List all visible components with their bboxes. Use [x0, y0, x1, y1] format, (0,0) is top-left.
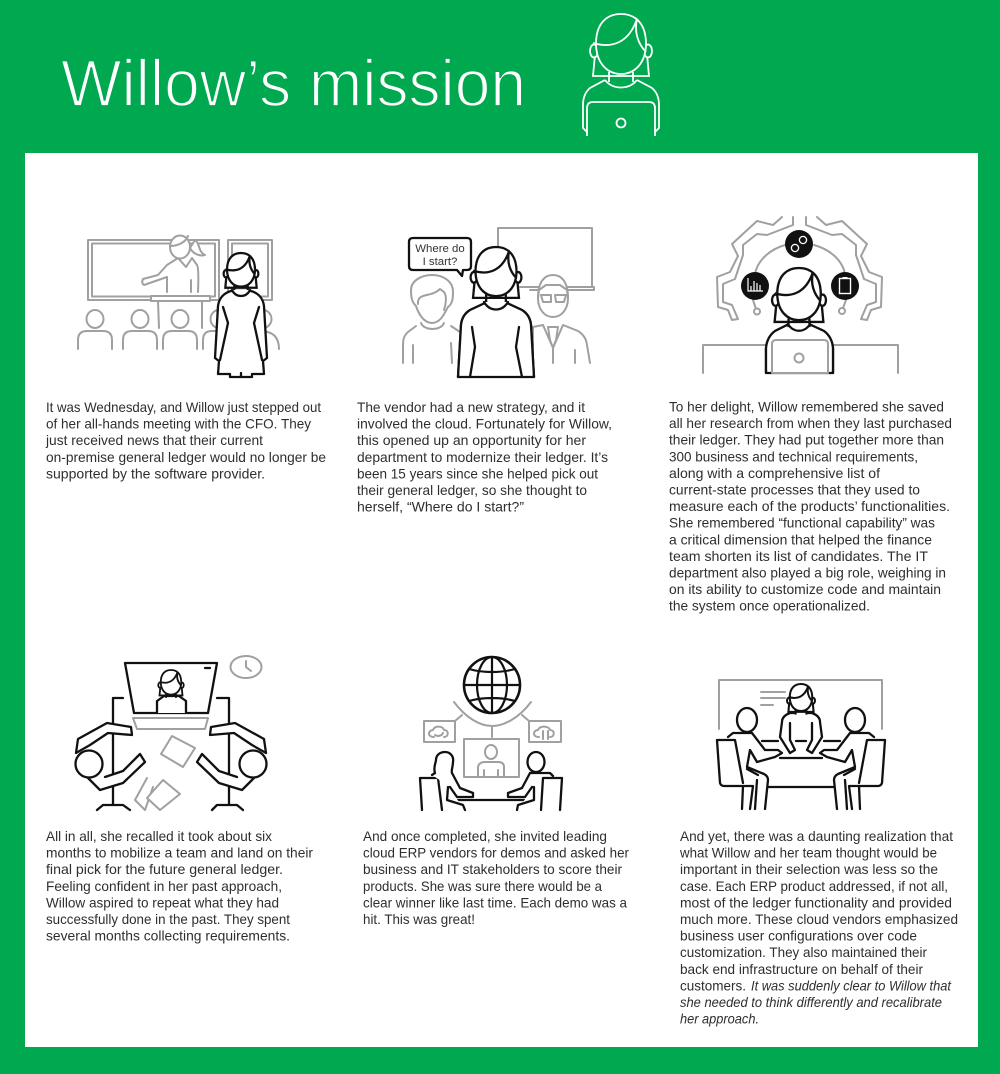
- text: paragraph 3: team shorten its list of candidates. The IT: [669, 549, 928, 564]
- text: paragraph 6: important in their selection was less so the: [680, 862, 938, 877]
- text: paragraph 2: their general ledger, so she thought to: [357, 483, 587, 498]
- text: paragraph 6: [679, 829, 958, 1027]
- text: paragraph 4: months to mobilize a team and land on their: [46, 846, 313, 861]
- text: paragraph 6: It was suddenly clear to Willow that: [751, 978, 952, 993]
- text: paragraph 2: been 15 years since she helped pick out: [357, 466, 598, 481]
- text: paragraph 6: business user configurations over code: [680, 929, 917, 944]
- illustration: all-hands meeting: [78, 236, 279, 377]
- illustration: cloud vendor demos with globe: [420, 657, 562, 810]
- text: paragraph 3: their ledger. They had put together more than: [669, 433, 944, 448]
- text: paragraph 4: several months collecting requirements.: [46, 929, 290, 944]
- text: paragraph 3: 300 business and technical requirements,: [669, 449, 918, 464]
- text: paragraph 3: department also played a big role, weighing in: [669, 566, 946, 580]
- text: paragraph 3: measure each of the products’ functionalities.: [669, 499, 950, 514]
- text: paragraph 1: on-premise general ledger would no longer be: [46, 450, 326, 465]
- text: paragraph 3: the system once operationalized.: [669, 599, 870, 614]
- text: paragraph 3: all her research from when they last purchased: [669, 416, 952, 431]
- text: paragraph 4: Willow aspired to repeat what they had: [46, 895, 279, 910]
- text: paragraph 6: what Willow and her team thought would be: [679, 846, 937, 861]
- text: paragraph 2: herself, “Where do I start?”: [357, 500, 524, 515]
- text: paragraph 5: clear winner like last time. Each demo was a: [363, 895, 627, 910]
- text: paragraph 3: on its ability to customize code and maintain: [669, 582, 941, 597]
- text: paragraph 4: final pick for the future general ledger.: [46, 862, 283, 877]
- speech bubble text: I start?: [423, 256, 457, 268]
- text: paragraph 1: just received news that their current: [45, 433, 263, 448]
- text: paragraph 6: most of the ledger functionality and provided: [680, 895, 952, 910]
- text: paragraph 6: her approach.: [680, 1012, 759, 1027]
- text: paragraph 3: She remembered “functional capability” was: [669, 516, 935, 531]
- text: paragraph 3: [669, 400, 952, 614]
- text: paragraph 2: The vendor had a new strategy, and it: [357, 400, 585, 415]
- text: paragraph 6: customers.: [680, 978, 746, 993]
- text: paragraph 5: products. She was sure there would be a: [363, 879, 602, 894]
- text: paragraph 6: And yet, there was a daunting realization that: [680, 829, 953, 844]
- text: paragraph 4: [46, 829, 313, 944]
- text: paragraph 3: a critical dimension that helped the finance: [669, 532, 932, 547]
- text: paragraph 6: back end infrastructure on behalf of their: [680, 962, 923, 977]
- icon: Willow with laptop: [583, 14, 659, 136]
- text: paragraph 3: To her delight, Willow remembered she saved: [669, 400, 944, 414]
- text: paragraph 1: of her all-hands meeting with the CFO. They: [46, 417, 311, 432]
- text: paragraph 5: cloud ERP vendors for demos and asked her: [363, 846, 629, 861]
- text: paragraph 2: this opened up an opportunity for her: [357, 433, 586, 448]
- title: Willow’s mission: [61, 46, 526, 120]
- text: paragraph 1: It was Wednesday, and Willow just stepped out: [46, 400, 321, 415]
- text: paragraph 4: All in all, she recalled it took about six: [46, 829, 272, 844]
- text: paragraph 5: business and IT stakeholders to score their: [363, 862, 622, 877]
- illustration: Where do I start: [403, 228, 594, 377]
- white content panel: [25, 153, 978, 1047]
- illustration: video call collecting requirements: [76, 656, 266, 810]
- text: paragraph 2: department to modernize their ledger. It’s: [357, 450, 608, 465]
- illustration: gear with research icons: [703, 217, 898, 373]
- text: paragraph 5: hit. This was great!: [363, 912, 475, 927]
- text: paragraph 4: Feeling confident in her past approach,: [46, 879, 282, 894]
- illustration: team around table: [717, 680, 885, 809]
- text: paragraph 3: current-state processes that they used to: [669, 482, 920, 498]
- text: paragraph 2: [357, 400, 612, 515]
- speech bubble text: Where do: [415, 243, 465, 255]
- speech bubble text: [415, 243, 465, 268]
- text: paragraph 2: involved the cloud. Fortunately for Willow,: [357, 417, 612, 432]
- text: paragraph 3: along with a comprehensive list of: [669, 466, 880, 481]
- text: paragraph 6: customization. They also maintained their: [680, 945, 927, 960]
- text: paragraph 6: case. Each ERP product addressed, if not all,: [680, 879, 948, 894]
- text: paragraph 6: she needed to think differently and recalibrate: [680, 995, 942, 1010]
- text: paragraph 5: And once completed, she invited leading: [363, 829, 607, 844]
- text: paragraph 6: much more. These cloud vendors emphasized: [680, 912, 958, 927]
- text: paragraph 5: [363, 829, 629, 927]
- text: paragraph 4: successfully done in the past. They spent: [46, 912, 290, 927]
- text: paragraph 1: [45, 400, 326, 481]
- text: paragraph 1: supported by the software provider.: [46, 466, 265, 481]
